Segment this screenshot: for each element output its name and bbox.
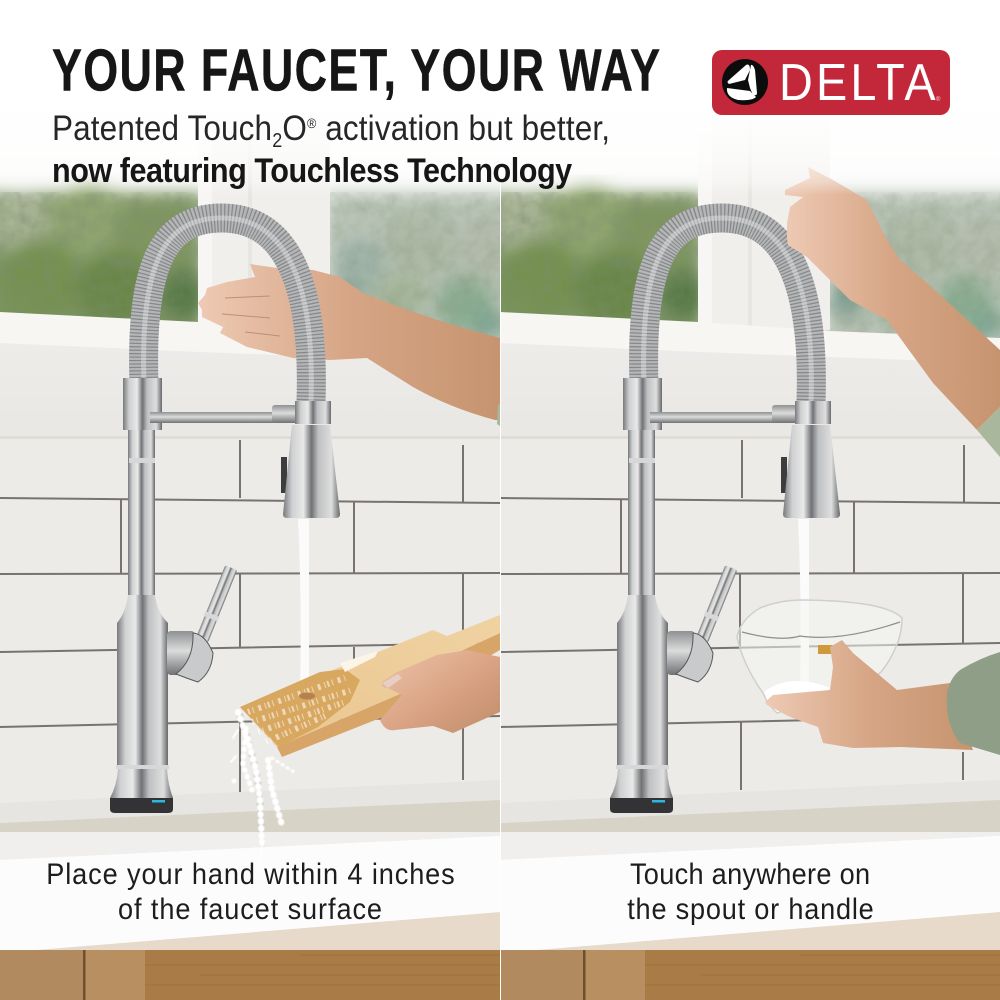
hand holding board bbox=[380, 650, 500, 733]
cutting board bbox=[240, 615, 500, 757]
panel: left scene, hand near faucet bbox=[0, 155, 500, 1000]
kitchen background with window, tiles, counter bbox=[0, 155, 500, 1000]
subtitle line one: 2 bbox=[272, 130, 282, 152]
Delta logo bbox=[712, 50, 950, 115]
logo emblem bbox=[722, 59, 768, 105]
sleeve, lower bbox=[947, 652, 1000, 755]
panel: right scene, touch on spout bbox=[501, 155, 1000, 1000]
subtitle line one: Patented Touch bbox=[52, 110, 272, 148]
hand holding bowl bbox=[765, 640, 973, 750]
subtitle line one: O bbox=[282, 110, 307, 148]
hand hovering behind spout bbox=[198, 264, 500, 426]
tile grout verticals bbox=[120, 440, 464, 792]
faucet, right bbox=[610, 218, 840, 813]
kitchen background with window, tiles, counter bbox=[501, 155, 1000, 1000]
subtitle line one: ® bbox=[307, 115, 316, 131]
white header fade bbox=[0, 0, 1000, 195]
caption band, left bbox=[0, 832, 500, 950]
tile grout verticals bbox=[620, 440, 965, 790]
caption, right: Touch anywhere on bbox=[630, 858, 870, 891]
subtitle line one: activation but better, bbox=[316, 110, 610, 148]
logo wordmark: DELTA bbox=[779, 54, 936, 112]
water stream bbox=[298, 519, 309, 690]
logo red badge bbox=[712, 50, 950, 115]
caption, left: Place your hand within 4 inches bbox=[46, 858, 455, 891]
logo registered mark: ® bbox=[936, 96, 941, 103]
glass bowl bbox=[737, 600, 902, 713]
water splash bbox=[230, 709, 294, 847]
caption, left second line: of the faucet surface bbox=[118, 893, 382, 926]
hand touching spout bbox=[785, 167, 1000, 430]
water stream bbox=[798, 519, 809, 648]
caption band, right bbox=[501, 832, 1000, 950]
subtitle line two: now featuring Touchless Technology bbox=[52, 152, 572, 189]
faucet, left bbox=[110, 218, 340, 813]
sleeve, upper bbox=[977, 407, 1000, 457]
caption, right second line: the spout or handle bbox=[627, 893, 874, 926]
title: YOUR FAUCET, YOUR WAY bbox=[52, 39, 660, 104]
